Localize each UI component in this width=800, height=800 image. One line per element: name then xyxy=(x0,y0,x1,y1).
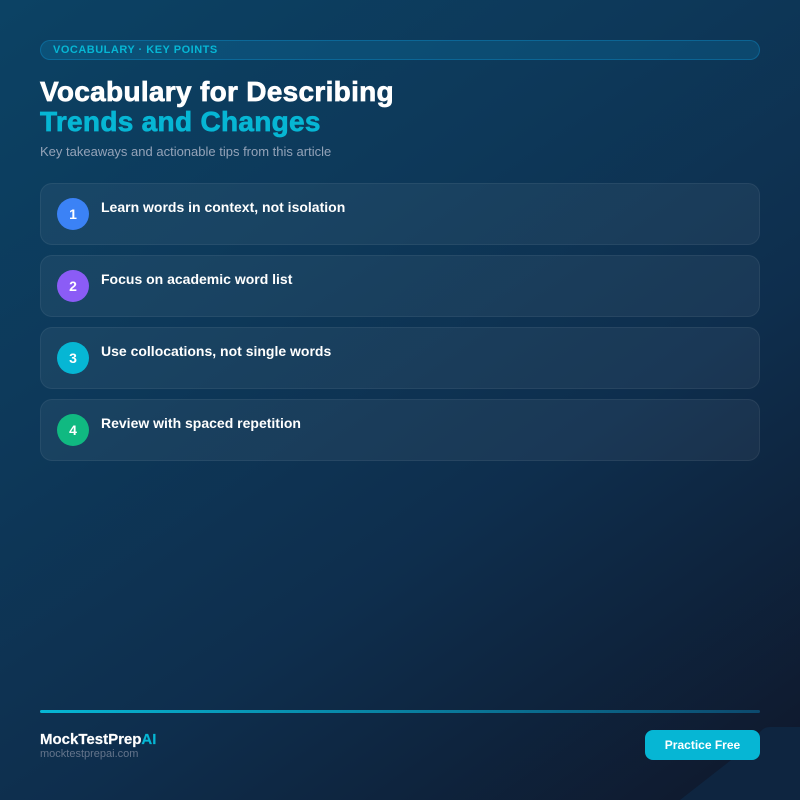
icon: number 2 xyxy=(57,270,89,302)
tip 4 text: Review with spaced repetition xyxy=(101,415,301,431)
button: practice free xyxy=(645,730,760,760)
panel: tip 1 xyxy=(40,183,760,245)
icon: number 2: 2 xyxy=(69,278,77,294)
tip 3 text: Use collocations, not single words xyxy=(101,343,331,359)
icon: number 3: 3 xyxy=(69,350,77,366)
title xyxy=(40,76,394,138)
title: Vocabulary for Describing xyxy=(40,76,394,107)
icon: number 4: 4 xyxy=(69,422,77,438)
brand url: mocktestprepai.com xyxy=(40,748,138,760)
accent line xyxy=(40,710,760,713)
category badge: VOCABULARY · KEY POINTS xyxy=(53,44,218,56)
button: practice free: Practice Free xyxy=(665,738,740,752)
category badge xyxy=(40,40,760,60)
icon: number 3 xyxy=(57,342,89,374)
icon: number 4 xyxy=(57,414,89,446)
panel: tip 2 xyxy=(40,255,760,317)
brand name: MockTestPrepAI xyxy=(40,731,156,748)
tip 1 text: Learn words in context, not isolation xyxy=(101,199,345,215)
tip 2 text: Focus on academic word list xyxy=(101,271,292,287)
title: Trends and Changes xyxy=(40,106,321,137)
panel: tip 4 xyxy=(40,399,760,461)
icon: number 1: 1 xyxy=(69,206,77,222)
panel: tip 3 xyxy=(40,327,760,389)
subtitle: Key takeaways and actionable tips from this article xyxy=(40,144,331,159)
icon: number 1 xyxy=(57,198,89,230)
